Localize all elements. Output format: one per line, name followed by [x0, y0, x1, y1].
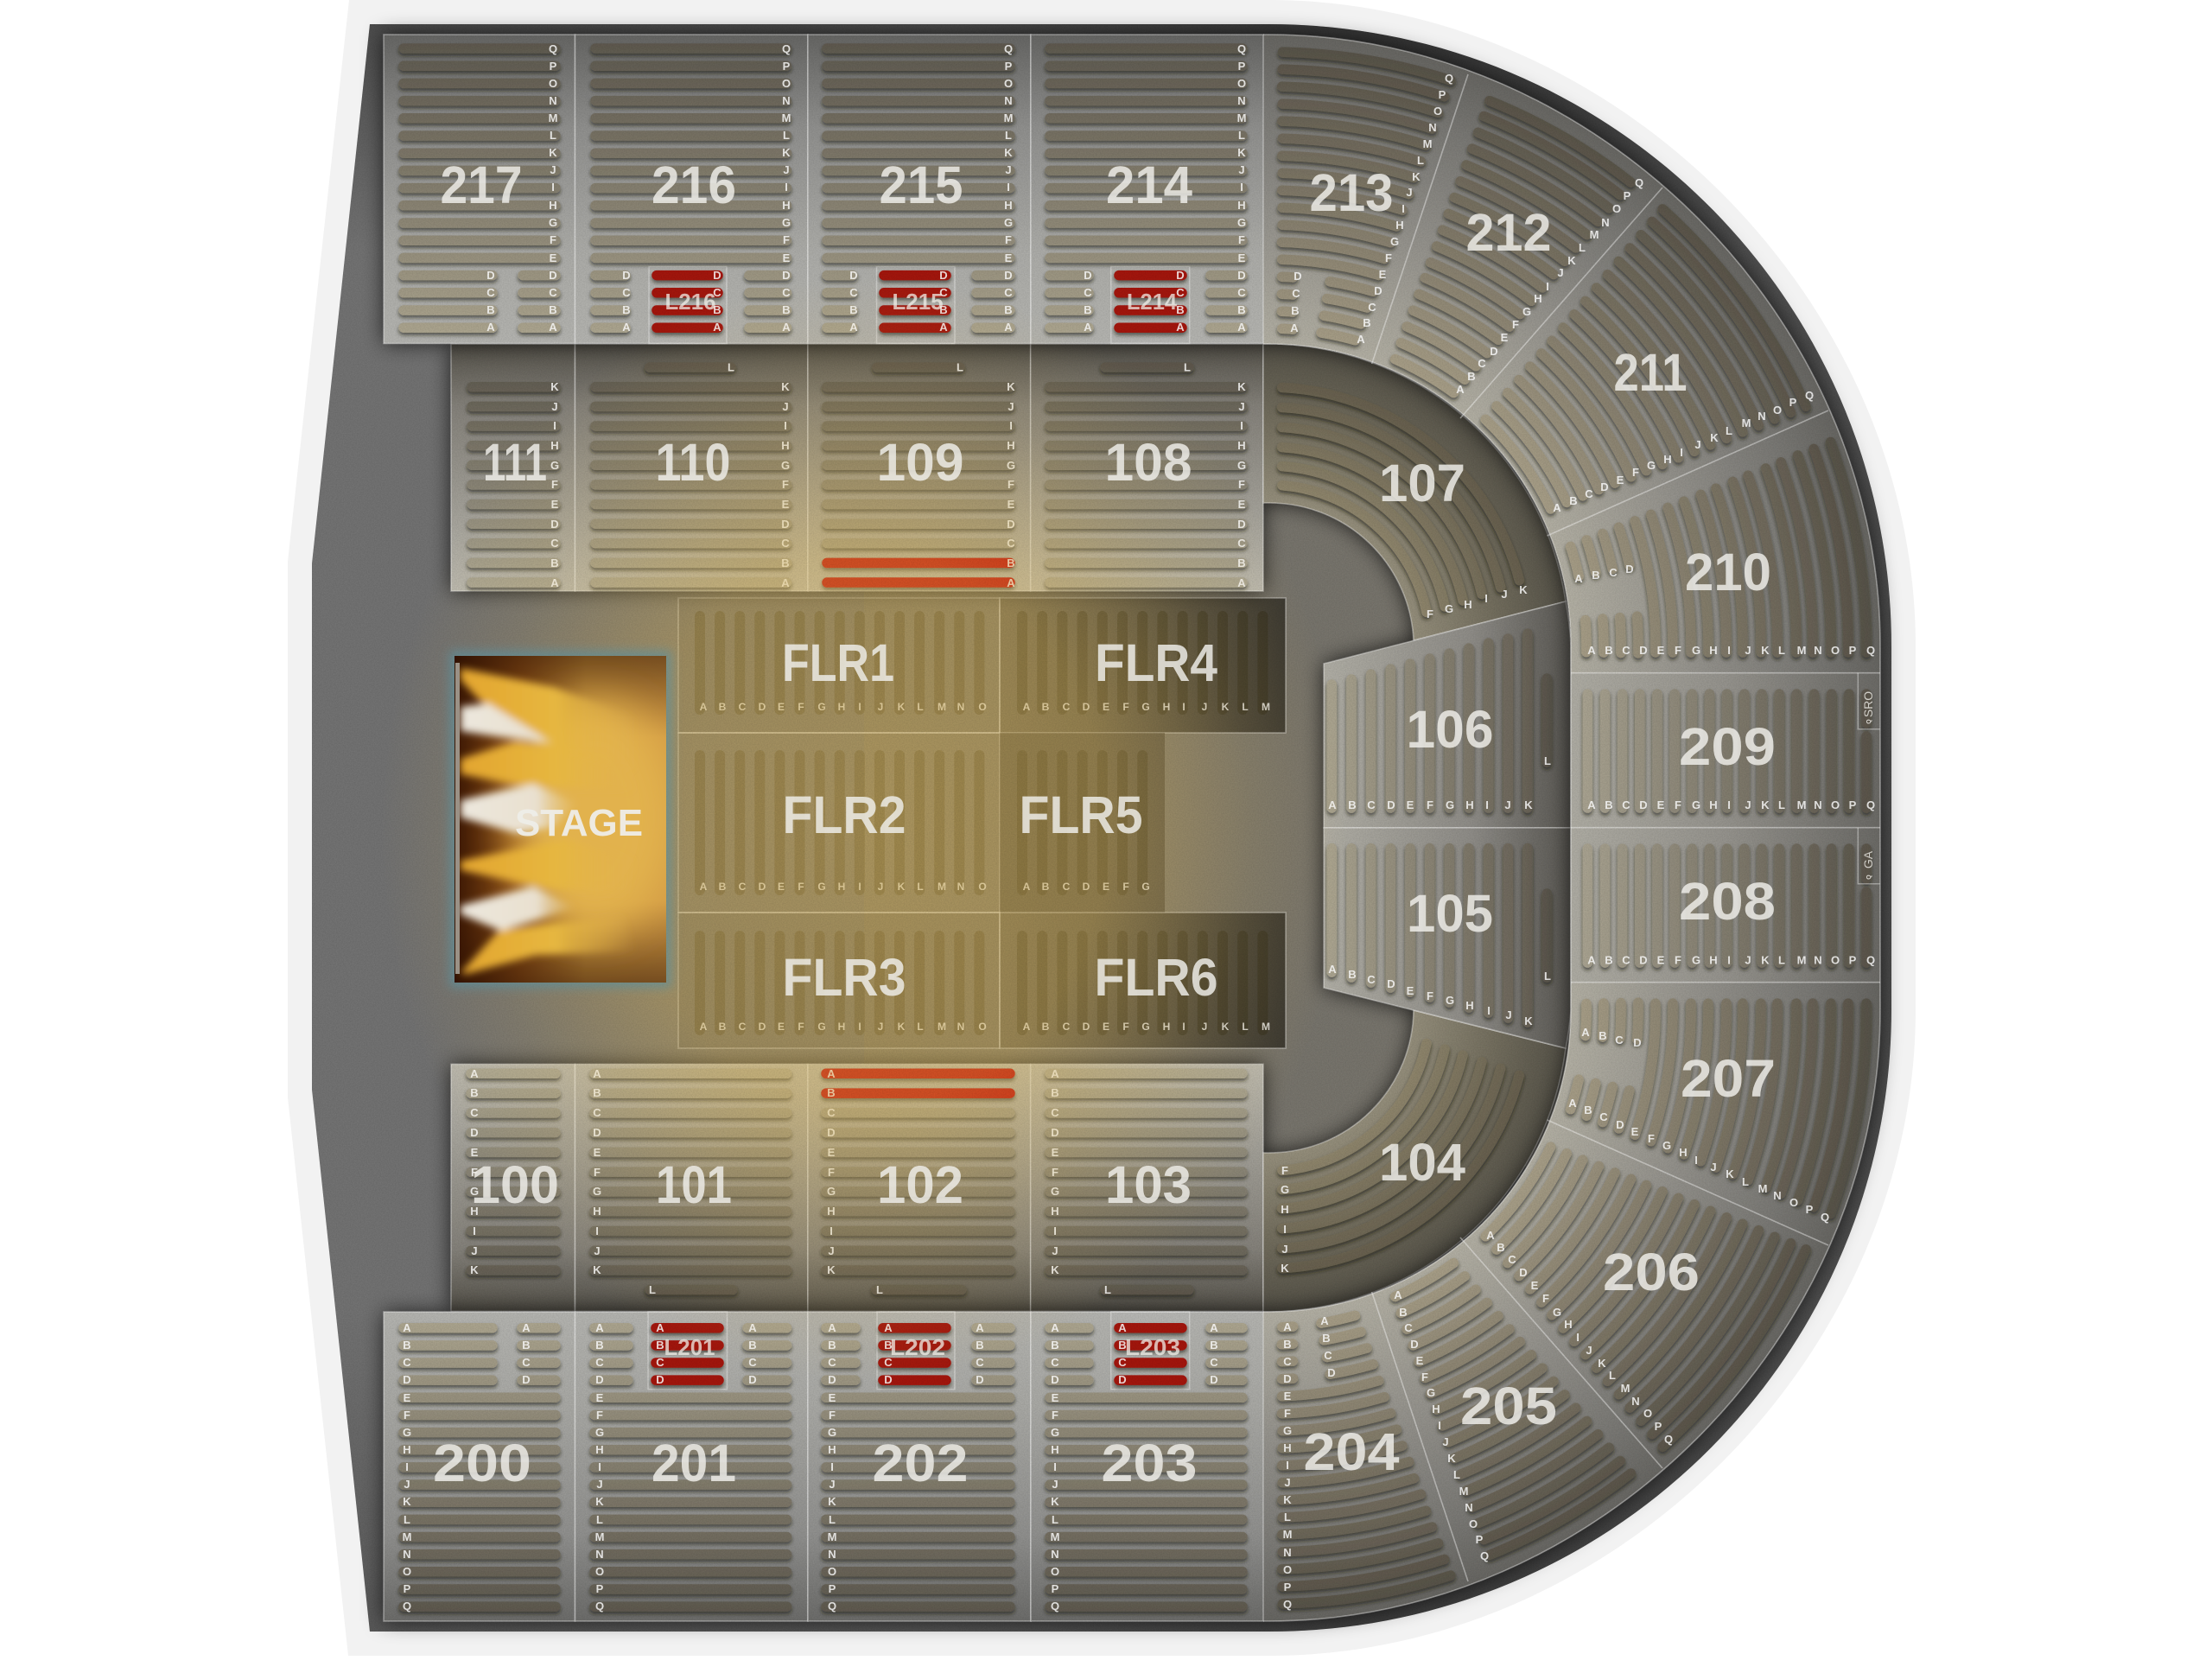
section 209	[1571, 673, 1880, 828]
upper bowl shadow	[384, 35, 1880, 1621]
loge rows L202	[883, 1328, 946, 1380]
label: L216: L216	[665, 289, 715, 315]
section 108	[1031, 344, 1263, 591]
section 210: ABCD	[1574, 563, 1634, 585]
section 204	[676, 417, 1863, 1611]
section 100: ABCDEFGHIJK	[470, 1067, 479, 1276]
stage light beams	[454, 664, 623, 980]
section 210	[672, 48, 1880, 1243]
label: L215: L215	[892, 289, 944, 315]
label: 206: 206	[1603, 1243, 1700, 1301]
label: 201: 201	[652, 1434, 736, 1492]
section 201	[575, 1312, 808, 1621]
loge rows L214	[1119, 276, 1182, 328]
stage	[454, 656, 678, 983]
label: L202: L202	[890, 1334, 945, 1360]
section 214: QPONMLKJIHGFEDCBA	[1237, 42, 1246, 334]
label: 207: 207	[1681, 1049, 1776, 1108]
label: FLR3: FLR3	[783, 948, 906, 1007]
section 206: ABCDEFGHIJKLMNOPQ	[1486, 1229, 1673, 1446]
section 206	[682, 423, 1857, 1598]
label: 104: 104	[1379, 1133, 1465, 1192]
section 209: ABCDEFGHIJKLMNOPQ	[1587, 798, 1875, 811]
section 208	[1571, 828, 1880, 983]
section 102: ABCDEFGHIJKL	[827, 1067, 883, 1296]
label: 111: 111	[483, 433, 547, 492]
box GA: Q	[1866, 875, 1872, 880]
section 215: QPONMLKJIHGFEDCBA	[1004, 42, 1013, 334]
box L201	[648, 1312, 728, 1390]
section 204: ABCDEFGHIJKLMNOPQ	[1283, 1320, 1292, 1611]
label: 102: 102	[877, 1155, 963, 1214]
box L215	[876, 266, 955, 344]
section 110: KJIHGFEDCBAL	[728, 361, 790, 589]
section 200: ABCDEFGHIJKLMNOPQ	[403, 1321, 411, 1613]
section 207: ABCDEFGHIJKLMNOPQ	[1568, 1097, 1829, 1224]
box L214	[1111, 266, 1190, 344]
section 105: ABCDEFGHIJKL	[1328, 963, 1551, 1027]
section 104: FGHIJK	[1281, 1164, 1289, 1275]
section 203	[1031, 1312, 1263, 1621]
label: 101: 101	[656, 1155, 732, 1214]
label: 209: 209	[1679, 717, 1776, 776]
section 101: ABCDEFGHIJKL	[593, 1067, 656, 1296]
section 213: DCBA	[1290, 270, 1302, 334]
section 216: QPONMLKJIHGFEDCBA	[782, 42, 791, 334]
label: L203: L203	[1125, 1334, 1180, 1360]
floor section FLR6: ABCDEFGHIJKLM	[1023, 1021, 1270, 1033]
label: L214: L214	[1127, 289, 1178, 315]
box GA	[1858, 828, 1880, 884]
label: FLR6: FLR6	[1094, 948, 1218, 1007]
section 203: ABCDABCD	[1118, 1321, 1218, 1386]
venue plate	[312, 24, 1891, 1632]
section 211	[682, 58, 1857, 1233]
label: 108: 108	[1104, 433, 1192, 492]
section 104	[1011, 752, 1566, 1312]
label: 106: 106	[1407, 700, 1493, 759]
label: FLR1: FLR1	[782, 633, 894, 692]
premium rows 109	[827, 563, 1010, 582]
background halo	[288, 0, 1916, 1656]
section 213	[676, 52, 1863, 1239]
label: FLR5: FLR5	[1020, 786, 1142, 844]
floor section FLR3: ABCDEFGHIJKLMNO	[700, 1021, 987, 1033]
section 102	[808, 1064, 1031, 1311]
section 214: DCBADCBA	[1084, 269, 1185, 334]
floor section FLR3	[678, 913, 1000, 1048]
label: 109: 109	[876, 433, 964, 492]
floor section FLR5: ABCDEFG	[1023, 881, 1150, 893]
label: 208: 208	[1679, 872, 1776, 931]
box L203	[1111, 1312, 1190, 1390]
section 205: ABCDEFGHIJKLMNOPQ	[1394, 1288, 1489, 1562]
floor section FLR1: ABCDEFGHIJKLMNO	[700, 701, 987, 713]
section 207: ABCD	[1581, 1026, 1642, 1049]
section 214	[1031, 35, 1263, 344]
surface grain	[294, 17, 1901, 1642]
label: 202: 202	[873, 1434, 968, 1492]
section 109: KJIHGFEDCBAL	[957, 361, 1015, 589]
label: 105: 105	[1407, 884, 1493, 943]
section 100	[451, 1064, 575, 1311]
section 103	[1031, 1064, 1263, 1311]
section 212: ABCDEFGHIJKLMNOPQ	[1456, 176, 1643, 396]
section 108: KJIHGFEDCBAL	[1184, 361, 1246, 589]
section 216: DCBADCBA	[622, 269, 721, 334]
loge rows L201	[656, 1328, 719, 1380]
floor section FLR6	[1000, 913, 1286, 1048]
section 106	[1324, 601, 1571, 828]
section 101	[575, 1064, 808, 1311]
stage light glow	[312, 173, 1573, 1486]
section 107	[1011, 344, 1566, 904]
floor section FLR4: ABCDEFGHIJKLM	[1023, 701, 1270, 713]
section 210: ABCDEFGHIJKLMNOPQ	[1587, 644, 1875, 657]
section 215: DCBADCBA	[849, 269, 948, 334]
label: 204: 204	[1303, 1422, 1400, 1481]
section 217: QPONMLKJIHGFEDCBA	[549, 42, 557, 334]
section 205	[682, 423, 1857, 1598]
section 215	[808, 35, 1031, 344]
box SRO: SRO	[1861, 691, 1875, 717]
section 208: ABCDEFGHIJKLMNOPQ	[1587, 954, 1875, 966]
loge rows L215	[884, 276, 946, 328]
section 109	[808, 344, 1031, 591]
box GA: GA	[1861, 850, 1875, 868]
label: 210: 210	[1685, 543, 1771, 601]
label: 214: 214	[1106, 156, 1192, 214]
label: FLR2: FLR2	[783, 786, 906, 844]
label: 211: 211	[1614, 343, 1687, 402]
label: 100: 100	[471, 1155, 559, 1214]
label: 200: 200	[433, 1434, 531, 1492]
section 217: DCBA	[486, 269, 495, 334]
label: 215: 215	[880, 156, 963, 214]
upper bowl curved panels	[1263, 35, 1880, 1621]
floor section FLR5	[1000, 733, 1165, 913]
box SRO: Q	[1866, 719, 1872, 724]
section 200	[384, 1312, 575, 1621]
section 202: ABCDABCD	[884, 1321, 984, 1386]
section 211: ABCDEFGHIJKLMNOPQ	[1553, 389, 1814, 514]
floor section FLR2: ABCDEFGHIJKLMNO	[700, 881, 987, 893]
label: 213: 213	[1310, 163, 1393, 222]
label: 216: 216	[652, 156, 736, 214]
box L216	[649, 266, 727, 344]
section 201: ABCDEFGHIJKLMNOPQ	[595, 1321, 604, 1613]
loge rows L216	[657, 276, 718, 328]
section 213: QPONMLKJIHGFEDCBA	[1357, 72, 1453, 346]
section 202	[808, 1312, 1031, 1621]
label: 103: 103	[1105, 1155, 1192, 1214]
label: 110: 110	[655, 433, 731, 492]
label: STAGE: STAGE	[515, 802, 643, 844]
section 106: ABCDEFGHIJKL	[1328, 754, 1551, 811]
stage halo	[449, 651, 671, 988]
section 202: ABCDEFGHIJKLMNOPQ	[828, 1321, 836, 1613]
label: FLR4: FLR4	[1095, 633, 1217, 692]
label: L201: L201	[664, 1334, 715, 1360]
section 207	[672, 413, 1866, 1607]
section 111: KJIHGFEDCBA	[550, 380, 559, 589]
box L202	[877, 1312, 955, 1390]
section 105	[1324, 828, 1571, 1048]
floor section FLR4	[1000, 598, 1286, 733]
section 107: FGHIJK	[1427, 583, 1528, 620]
section 212	[682, 58, 1857, 1233]
label: 217: 217	[441, 156, 522, 214]
section 203: ABCDEFGHIJKLMNOPQ	[1051, 1321, 1059, 1613]
section 201: ABCDABCD	[656, 1321, 757, 1386]
section 110	[575, 344, 808, 591]
loge rows L203	[1119, 1328, 1182, 1380]
section 216	[575, 35, 808, 344]
floor section FLR1	[678, 598, 1000, 733]
section 217	[384, 35, 575, 344]
label: 212: 212	[1465, 203, 1552, 262]
label: 107: 107	[1379, 454, 1465, 512]
label: 203: 203	[1101, 1434, 1198, 1492]
section 111	[451, 344, 575, 591]
section 200: ABCD	[522, 1321, 531, 1386]
lower bowl shadow	[451, 344, 1571, 1312]
premium rows 102	[826, 1073, 1010, 1093]
box SRO	[1858, 673, 1880, 729]
floor section FLR2	[678, 733, 1000, 913]
section 204: ABCD	[1320, 1314, 1336, 1379]
section 103: ABCDEFGHIJKL	[1051, 1067, 1111, 1296]
label: 205: 205	[1460, 1377, 1557, 1435]
